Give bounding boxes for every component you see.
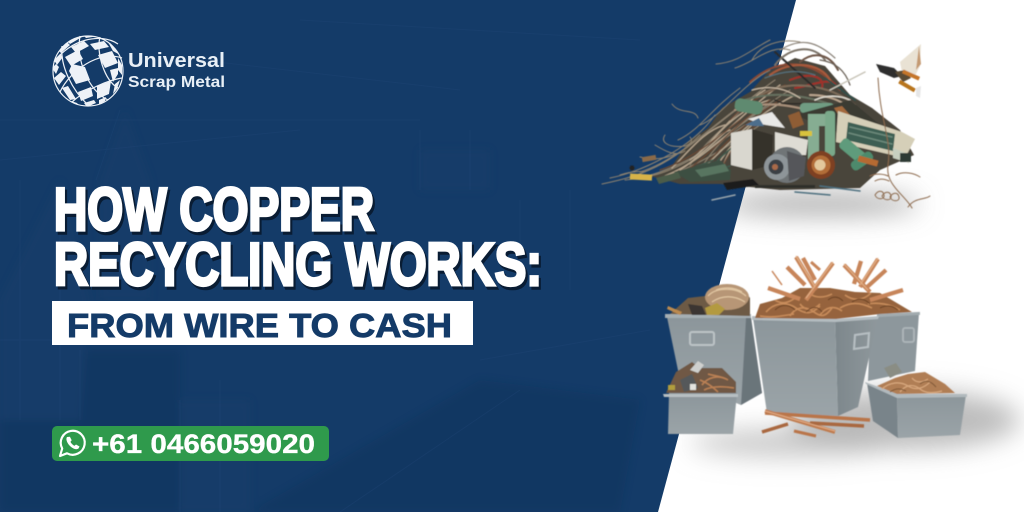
title text xyxy=(54,176,542,298)
title shadow: HOW COPPER xyxy=(56,179,376,246)
copper heap: centre xyxy=(755,256,912,319)
motor xyxy=(769,147,805,183)
base clutter xyxy=(674,160,731,182)
top tangle wires xyxy=(735,42,860,120)
title text: HOW COPPER xyxy=(54,176,374,243)
icon: checkered globe xyxy=(52,33,123,108)
green coils and parts xyxy=(630,98,915,190)
pile base mass xyxy=(650,58,914,190)
title xyxy=(54,176,544,301)
logo text: Universal: Universal xyxy=(128,50,225,72)
icon: whatsapp xyxy=(60,431,85,456)
copper heap: small right xyxy=(877,363,955,394)
copper coil xyxy=(807,151,835,179)
title shadow: RECYCLING WORKS: xyxy=(56,234,544,301)
transformer xyxy=(836,111,915,158)
bin: rear left xyxy=(665,314,762,405)
image: scrap wire pile xyxy=(602,40,930,208)
bin: small left xyxy=(663,393,738,434)
shadows on white side xyxy=(690,192,1020,457)
copper heap: left bin xyxy=(667,284,750,316)
logo xyxy=(52,33,225,108)
panel: navy diagonal background xyxy=(0,0,796,512)
phone button xyxy=(52,426,329,461)
subtitle text: FROM WIRE TO CASH xyxy=(67,307,452,344)
small wires right and floor xyxy=(870,78,930,208)
title text: RECYCLING WORKS: xyxy=(54,231,542,298)
green tubes xyxy=(838,137,868,165)
bin: back right xyxy=(868,312,920,381)
image: bins of copper scrap xyxy=(663,256,967,438)
robotic gripper xyxy=(876,44,921,98)
bin: centre large xyxy=(752,316,879,416)
title shadow xyxy=(56,179,544,301)
logo text: Scrap Metal: Scrap Metal xyxy=(128,74,225,91)
stray wires left xyxy=(602,40,800,184)
phone number: +61 0466059020 xyxy=(92,429,315,459)
bin: small right xyxy=(865,382,967,438)
copper heap: small left xyxy=(666,361,736,393)
copper pipes on floor xyxy=(762,411,870,436)
white box part xyxy=(731,129,752,170)
subtitle banner xyxy=(52,301,473,345)
